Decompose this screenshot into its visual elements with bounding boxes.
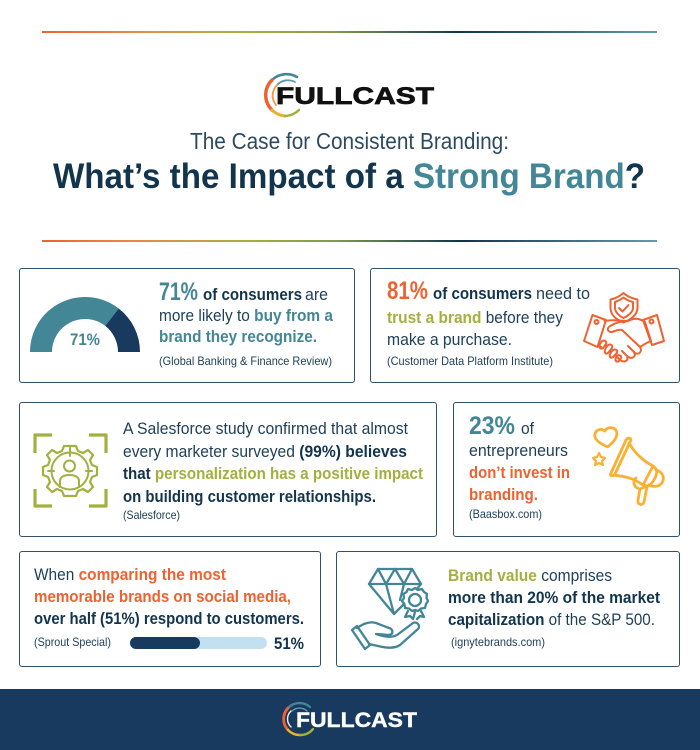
progress bar: 51%	[130, 634, 304, 653]
text: brand value statistic: Brand value comprises	[448, 566, 612, 585]
text: social media statistic: over half (51%) respond to customers.	[34, 609, 304, 628]
gauge chart: 71%	[30, 297, 140, 352]
panel: 81% of consumers	[370, 268, 680, 382]
panel: social media brands	[20, 552, 320, 666]
text: 23% statistic: branding.	[469, 485, 538, 504]
text: personalization statistic: on building customer relationships.	[123, 487, 376, 506]
text: 71% statistic: brand they recognize.	[159, 327, 317, 346]
text: 71% statistic	[159, 278, 333, 368]
text: 81% statistic	[387, 277, 590, 368]
logo: Fullcast	[266, 74, 434, 116]
text: personalization statistic: A Salesforce study confirmed that almost	[123, 419, 408, 438]
gauge chart: 71%: 71%	[70, 330, 100, 349]
text: 71% statistic: (Global Banking & Finance Review)	[159, 354, 332, 368]
text: 23% statistic: don’t invest in	[469, 463, 570, 482]
text: personalization statistic: every marketer surveyed (99%) believes	[123, 442, 407, 461]
progress bar: 51%: 51%	[274, 634, 304, 653]
text: personalization statistic	[123, 419, 423, 522]
panel: 23% of entrepreneurs	[454, 402, 680, 536]
text: 71% statistic: 71%	[159, 278, 198, 306]
icon: handshake with shield	[584, 293, 664, 362]
text: brand value statistic: more than 20% of the market	[448, 588, 660, 607]
text: social media statistic	[34, 565, 304, 649]
text: 81% statistic: of consumers	[433, 284, 532, 303]
text: 23% statistic	[469, 412, 570, 521]
text: 71% statistic: are	[305, 285, 328, 304]
panel: 71% of consumers	[20, 268, 354, 382]
text: 81% statistic: make a purchase.	[387, 330, 512, 349]
icon: gear with person	[35, 435, 106, 506]
icon: diamond on hand with rosette	[352, 569, 428, 649]
text: social media statistic: When comparing the most	[34, 565, 226, 584]
text: 23% statistic: entrepreneurs	[469, 441, 568, 460]
text: brand value statistic: (ignytebrands.com)	[451, 635, 545, 649]
text: social media statistic: memorable brands on social media,	[34, 587, 291, 606]
logo: Fullcast: FULLCAST	[276, 83, 434, 110]
icon: megaphone with heart and star	[593, 427, 663, 504]
text: 23% statistic: (Baasbox.com)	[469, 507, 542, 521]
text: 71% statistic: more likely to buy from a	[159, 306, 333, 325]
text: brand value statistic	[448, 566, 660, 649]
panel: brand value	[336, 552, 680, 666]
text: personalization statistic: that personalization has a positive impact	[123, 464, 423, 483]
text: 23% statistic: 23%	[469, 412, 515, 440]
text: 81% statistic: trust a brand before they	[387, 308, 563, 327]
text: 23% statistic: of	[521, 419, 534, 438]
panel: personalization study	[20, 402, 436, 536]
text: 71% statistic: of consumers	[203, 285, 302, 304]
text: 81% statistic: 81%	[387, 277, 428, 305]
title: What’s the Impact of a Strong Brand?	[53, 157, 645, 196]
footer band with logo	[0, 689, 700, 750]
subtitle: The Case for Consistent Branding:	[190, 128, 509, 154]
text: 81% statistic: need to	[536, 284, 590, 303]
footer band with logo: FULLCAST	[296, 709, 417, 732]
text: 81% statistic: (Customer Data Platform Institute)	[387, 354, 553, 368]
text: social media statistic: (Sprout Special)	[34, 635, 111, 649]
text: brand value statistic: capitalization of the S&P 500.	[448, 610, 655, 629]
text: personalization statistic: (Salesforce)	[123, 508, 180, 522]
